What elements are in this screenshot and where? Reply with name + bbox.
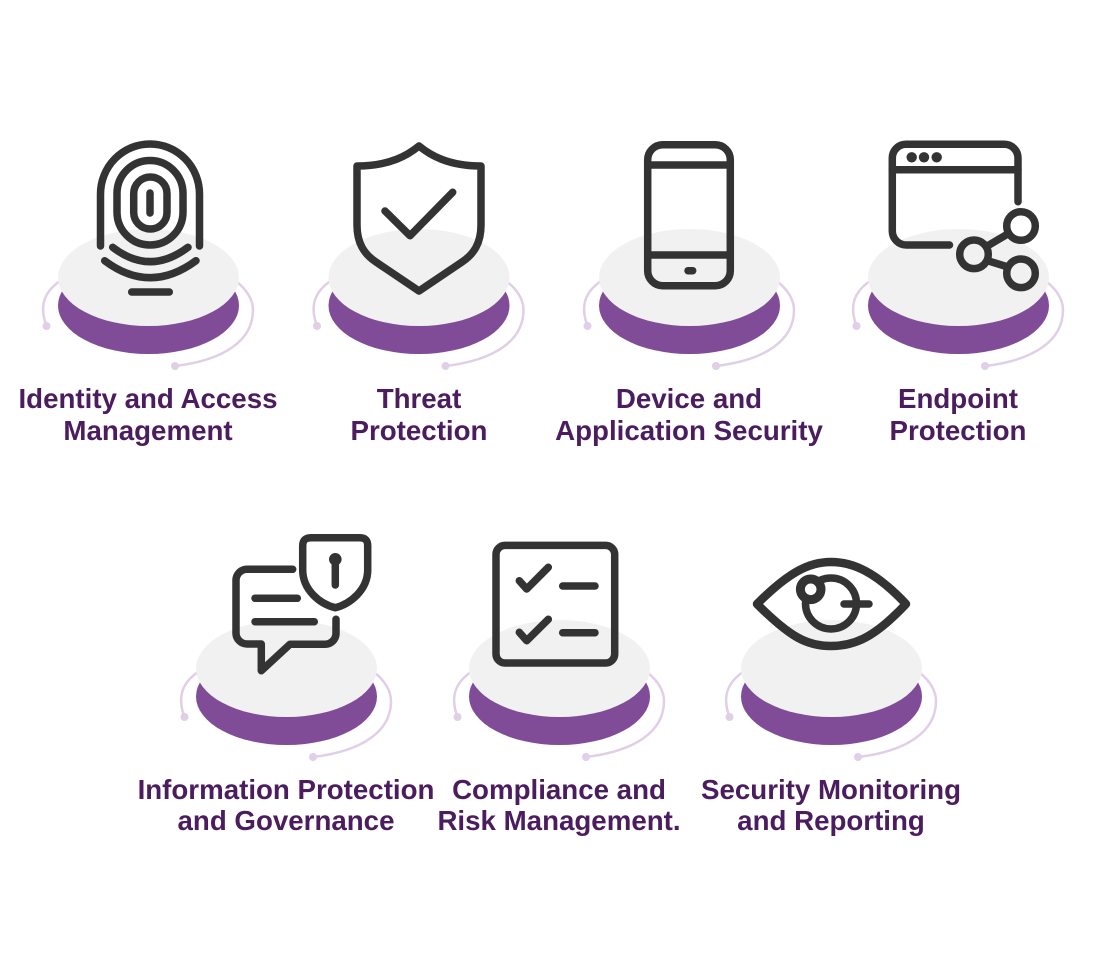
- pedestal: endpoint protection: [852, 229, 1063, 370]
- label: device and application security: Device and: [616, 383, 762, 414]
- label: security monitoring and reporting: and Reporting: [737, 805, 925, 836]
- icon: eye: [757, 562, 906, 646]
- pedestal: device and application: [584, 229, 794, 370]
- pedestal: compliance: [454, 620, 664, 761]
- pedestal: security monitoring: [726, 620, 936, 761]
- label: compliance and risk management: Risk Management.: [437, 805, 681, 836]
- label: device and application security: Application Security: [555, 415, 823, 446]
- label: threat protection: Protection: [351, 415, 487, 446]
- icon: shield with check: [357, 146, 481, 291]
- label: security monitoring and reporting: Security Monitoring: [701, 774, 961, 805]
- label: compliance and risk management: Compliance and: [452, 774, 666, 805]
- icon: smartphone: [648, 145, 730, 286]
- label: endpoint protection: Protection: [890, 415, 1026, 446]
- pedestal: identity and access: [42, 229, 253, 370]
- label: threat protection: Threat: [377, 383, 461, 414]
- label: identity and access management: Identity and Access: [18, 383, 278, 414]
- icon: browser window with share nodes: [892, 144, 1035, 288]
- pedestal: information protection: [180, 620, 391, 761]
- label: information protection and governance: and Governance: [178, 805, 394, 836]
- icon: checklist: [496, 545, 615, 663]
- label: identity and access management: Management: [63, 415, 233, 446]
- label: information protection and governance: Information Protection: [138, 774, 434, 805]
- label: endpoint protection: Endpoint: [898, 383, 1018, 414]
- pedestal: threat protection: [313, 229, 524, 370]
- icon: speech bubble with shield lock: [236, 538, 368, 671]
- icon: fingerprint: [100, 144, 200, 292]
